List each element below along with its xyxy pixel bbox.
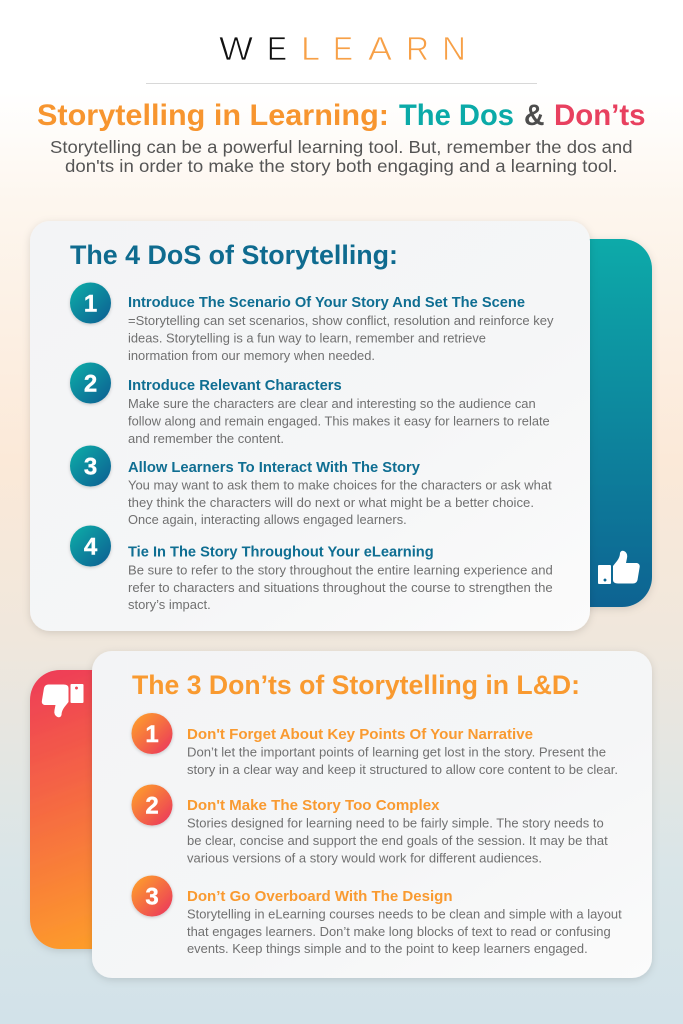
do item 1: inormation from our memory when needed.: [128, 349, 375, 363]
panel: the 4 dos: [30, 221, 590, 631]
icon: thumbs up: [598, 551, 640, 584]
do item 4: story’s impact.: [128, 598, 211, 612]
don't item 2: Stories designed for learning need to be fairly simple. The story needs to: [187, 816, 604, 830]
don't item 3: 3: [145, 884, 159, 910]
do item 4: Be sure to refer to the story throughout the entire learning experience and: [128, 564, 553, 578]
title: Don’ts: [554, 99, 646, 132]
do item 2: 2: [84, 370, 97, 398]
intro text: [50, 137, 633, 176]
do item 4: [70, 526, 553, 612]
icon: thumbs down: [42, 684, 84, 717]
do item 4: refer to characters and situations throughout the course to strengthen the: [128, 581, 553, 595]
logo: WE LEARN: L: [301, 31, 320, 68]
don't item 3: Don’t Go Overboard With The Design: [187, 888, 452, 905]
don't item 3: that engages learners. Don’t make long blocks of text to read or confusing: [187, 925, 611, 939]
don't item 1: [132, 713, 618, 777]
do item 3: they think the characters will do next or what might be a better choice.: [128, 496, 534, 510]
logo: WE LEARN: E: [333, 31, 353, 68]
logo: WE LEARN: N: [442, 31, 466, 68]
do item 2: and remember the content.: [128, 432, 284, 446]
title: Storytelling in Learning:: [37, 99, 389, 132]
do item 1: 1: [84, 290, 97, 318]
do item 3: You may want to ask them to make choices for the characters or ask what: [128, 478, 552, 492]
heading: 4 dos: The 4 DoS of Storytelling:: [70, 240, 398, 270]
do item 3: 3: [84, 454, 97, 480]
do item 3: Allow Learners To Interact With The Story: [128, 459, 421, 476]
panel: the 3 don'ts: [92, 651, 652, 978]
logo: WE LEARN: E: [267, 31, 287, 68]
logo: WE LEARN: [219, 31, 466, 68]
do item 1: ideas. Storytelling is a fun way to learn, remember and retrieve: [128, 332, 486, 346]
do item 1: Introduce The Scenario Of Your Story And Set The Scene: [128, 294, 525, 311]
don't item 1: Don’t let the important points of learning get lost in the story. Present the: [187, 746, 606, 760]
do item 2: [70, 362, 550, 446]
don't item 2: various versions of a story would work for different audiences.: [187, 852, 542, 866]
do item 1: [70, 282, 554, 363]
title: The Dos: [399, 99, 514, 132]
logo: WE LEARN: A: [368, 31, 393, 68]
don't item 3: events. Keep things simple and to the point to keep learners engaged.: [187, 942, 588, 956]
heading: 3 don'ts: The 3 Don’ts of Storytelling in L&D:: [132, 670, 580, 700]
do item 2: Make sure the characters are clear and interesting so the audience can: [128, 397, 536, 411]
do item 3: Once again, interacting allows engaged learners.: [128, 513, 407, 527]
don't item 1: story in a clear way and keep it structured to allow core content to be clear.: [187, 763, 618, 777]
don't item 3: [132, 876, 622, 956]
panel: dos backing with thumbs-up icon: [480, 239, 652, 607]
don't item 1: Don't Forget About Key Points Of Your Narrative: [187, 726, 533, 743]
do item 2: follow along and remain engaged. This makes it easy for learners to relate: [128, 414, 550, 428]
do item 4: Tie In The Story Throughout Your eLearning: [128, 544, 434, 560]
intro text: don'ts in order to make the story both engaging and a learning tool.: [65, 156, 618, 176]
do item 3: [70, 446, 552, 527]
don't item 2: [132, 784, 608, 866]
logo: WE LEARN: R: [406, 31, 429, 68]
don't item 2: Don't Make The Story Too Complex: [187, 797, 440, 814]
do item 1: =Storytelling can set scenarios, show conflict, resolution and reinforce key: [128, 314, 554, 328]
intro text: Storytelling can be a powerful learning tool. But, remember the dos and: [50, 137, 633, 157]
don't item 2: be clear, concise and support the end goals of the session. It may be that: [187, 834, 608, 848]
logo: WE LEARN: W: [219, 31, 253, 68]
do item 4: 4: [84, 534, 98, 560]
do item 2: Introduce Relevant Characters: [128, 377, 342, 394]
panel: don'ts backing with thumbs-down icon: [30, 670, 220, 949]
divider: [146, 83, 537, 84]
don't item 3: Storytelling in eLearning courses needs to be clean and simple with a layout: [187, 908, 622, 922]
title: &: [524, 99, 544, 132]
don't item 2: 2: [145, 792, 159, 820]
don't item 1: 1: [145, 721, 159, 748]
title: [37, 99, 646, 132]
